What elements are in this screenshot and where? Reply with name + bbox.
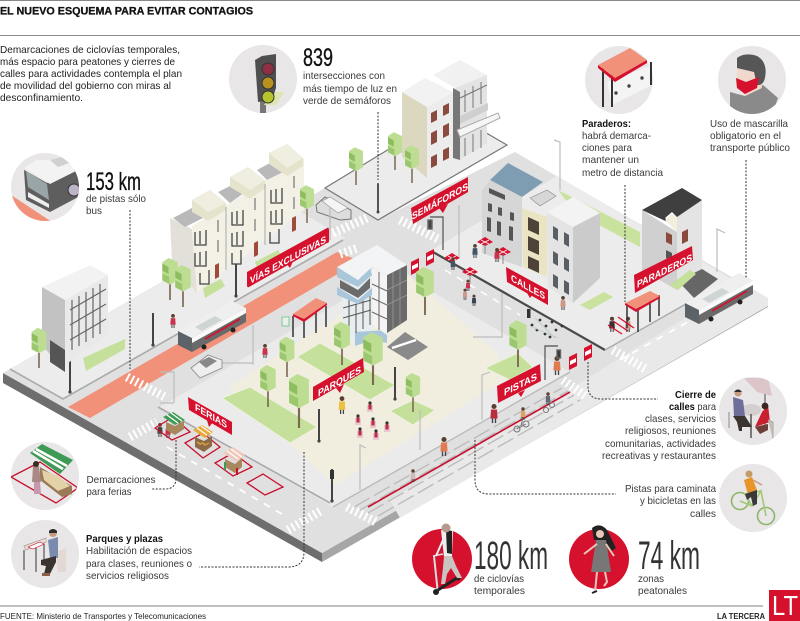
stat: 839: 839: [303, 44, 333, 72]
text: cierre de calles: comunitarias, actividades: [605, 439, 716, 450]
intro text: desconfinamiento.: [0, 93, 83, 104]
text: pistas: calles: [690, 509, 716, 520]
stat: 74 km: 74 km: [638, 534, 700, 578]
cyclists on the track: [514, 402, 554, 432]
text: pistas: Pistas para caminata: [625, 484, 716, 495]
text: parques y plazas: Habilitación de espacios: [86, 546, 192, 557]
car top: [316, 197, 351, 240]
white car on road: [191, 355, 222, 378]
text: cierre de calles: recreativas y restaurantes: [602, 451, 716, 462]
sign: vias exclusivas: VÍAS EXCLUSIVAS: [250, 233, 326, 287]
stat: 839: verde de semáforos: [303, 96, 391, 107]
bus left: [178, 301, 246, 352]
sidewalk block: right: [432, 176, 730, 350]
icon: scooter rider: [412, 524, 472, 595]
stat: 74 km: zonas: [638, 574, 664, 585]
stat: 839: más tiempo de luz en: [303, 84, 397, 95]
stat: 153 km: bus: [86, 206, 102, 217]
text: paraderos: mantener un: [582, 155, 639, 166]
stat: 839: intersecciones con: [303, 71, 385, 82]
icon: people at cafe table: [719, 377, 787, 445]
icon: market stall: [11, 442, 79, 510]
text: demarcaciones: para ferias: [86, 487, 132, 498]
icon: person at desk: [11, 520, 79, 588]
crowd of cyclists: [527, 309, 563, 338]
calles buildings: [482, 163, 600, 303]
text: cierre de calles: calles para: [669, 402, 716, 413]
corner signal: [545, 346, 560, 380]
tree left: [32, 328, 46, 368]
stat: 180 km: temporales: [474, 586, 525, 597]
isometric city map: [3, 60, 768, 562]
stat: 74 km: [638, 534, 700, 597]
sign: parques: PARQUES: [318, 364, 361, 400]
top buildings: [402, 60, 500, 178]
lawns: [222, 343, 533, 443]
intro text: más espacio para peatones y cierres de: [0, 57, 175, 68]
stat: 153 km: de pistas sólo: [86, 194, 146, 205]
stat: 180 km: [474, 534, 548, 597]
text: parques y plazas: servicios religiosos: [86, 571, 169, 582]
intro text: de movilidad del gobierno con miras al: [0, 81, 171, 92]
intro text: [0, 45, 182, 104]
sign: pistas: [497, 364, 541, 403]
icon: bus stop: [585, 46, 653, 114]
sign: calles: [506, 267, 548, 305]
signal lamp semaforos: [428, 217, 443, 250]
text: mascarilla: transporte público: [710, 143, 790, 154]
trees row and top: [162, 132, 402, 307]
icon: pedestrian woman: [569, 525, 629, 593]
bike and walking track: [354, 388, 580, 516]
text: paraderos: habrá demarca-: [582, 131, 651, 142]
la tercera wordmark: LA TERCERA: [717, 612, 765, 621]
icon: traffic light: [229, 45, 297, 113]
bus right: [685, 273, 753, 324]
stat: 74 km: peatonales: [638, 586, 687, 597]
market stalls and demarcations: [155, 412, 283, 495]
row of cream buildings: [170, 144, 304, 298]
intro text: calles para actividades contempla el plan: [0, 69, 182, 80]
tree at plaza rear: [416, 267, 434, 315]
stat: 839: [303, 44, 397, 107]
bus lane in salmon: [68, 252, 360, 418]
source: FUENTE: Ministerio de Transportes y Telecomunicaciones: [0, 611, 206, 621]
sign: semaforos: SEMÁFOROS: [412, 180, 468, 223]
stat: 153 km: [86, 168, 146, 217]
central glass building: [337, 245, 428, 360]
text: cierre de calles: clases, servicios: [645, 414, 716, 425]
bus stop shelter right: [608, 291, 660, 334]
right block lawns: [558, 190, 640, 247]
sign: paraderos: PARADEROS: [637, 252, 692, 291]
text: mascarilla: obligatorio en el: [710, 131, 781, 142]
sign: ferias: FERIAS: [195, 402, 227, 431]
intro text: Demarcaciones de ciclovías temporales,: [0, 45, 180, 56]
text: demarcaciones: Demarcaciones: [86, 475, 156, 486]
plaza chairs: [355, 401, 390, 440]
text: mascarilla: Uso de mascarilla: [710, 119, 788, 130]
sign: pistas: PISTAS: [504, 371, 537, 399]
sign: calles: CALLES: [511, 273, 545, 302]
paraderos building: [642, 188, 718, 298]
park block sidewalk: [160, 270, 570, 507]
text: mascarilla: [710, 119, 790, 154]
platform base: [3, 152, 768, 562]
icon: cyclist: [719, 464, 787, 532]
sidewalk block: left: [10, 207, 345, 399]
leader lines: [130, 112, 746, 567]
park trees: [260, 320, 527, 428]
text: paraderos: [582, 119, 663, 179]
title: EL NUEVO ESQUEMA PARA EVITAR CONTAGIOS: [0, 6, 253, 18]
left building: [42, 265, 125, 372]
road dashes: [167, 447, 287, 517]
stat: 153 km: 153 km: [86, 168, 141, 196]
text: cierre de calles: [602, 390, 716, 462]
bus stop shelter centre: [282, 298, 327, 338]
text: paraderos: metro de distancia: [582, 168, 663, 179]
text: parques y plazas: [86, 534, 192, 582]
text: demarcaciones: [86, 475, 156, 498]
text: parques y plazas: para clases, reuniones o: [86, 559, 192, 570]
text: paraderos: ciones para: [582, 143, 632, 154]
black street lamps: [68, 183, 397, 503]
text: cierre de calles: Cierre de: [675, 390, 716, 401]
stat: 180 km: 180 km: [474, 534, 548, 578]
text: parques y plazas: Parques y plazas: [86, 534, 163, 545]
icon: face mask: [718, 46, 786, 120]
text: pistas: y bicicletas en las: [640, 496, 716, 507]
crosswalks: [127, 218, 647, 530]
cafe umbrellas and street signs: [411, 237, 592, 370]
text: pistas: [625, 484, 716, 520]
pedestrians: [157, 244, 631, 456]
text: paraderos: Paraderos:: [582, 119, 631, 130]
sidewalk block: top: [325, 112, 507, 220]
icon: bus: [11, 153, 79, 221]
plaza surface: [228, 272, 505, 485]
text: cierre de calles: religiosos, reuniones: [625, 426, 716, 437]
grey lamp posts: [160, 140, 725, 490]
stat: 180 km: de ciclovías: [474, 574, 524, 585]
